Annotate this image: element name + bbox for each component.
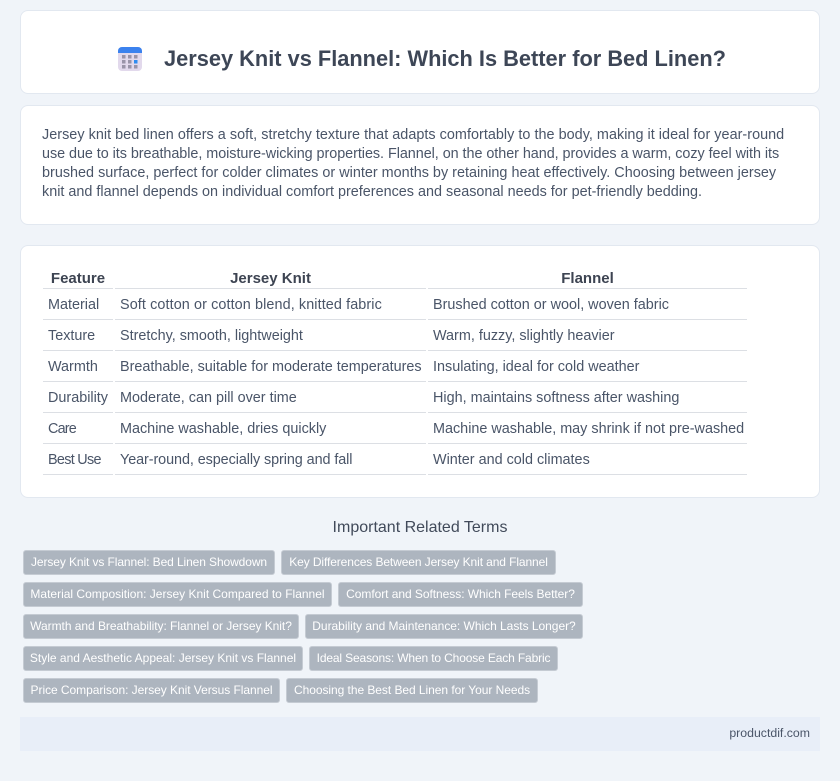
comparison table: Warmth [48,359,98,375]
comparison table: Winter and cold climates [433,452,590,468]
icon: calendar [118,47,142,71]
tag: Comfort and Softness: Which Feels Better? [346,587,575,601]
related terms tags [23,550,583,703]
tag: Warmth and Breathability: Flannel or Jersey Knit? [30,619,292,633]
intro paragraph: knit and flannel depends on individual comfort preferences and seasonal needs for pet-friendly bedding. [42,184,702,200]
comparison table: Stretchy, smooth, lightweight [120,328,303,344]
intro paragraph: brushed surface, perfect for colder climates or winter months by retaining heat effectively. Choosing between jersey [42,165,776,181]
comparison table: Machine washable, may shrink if not pre-washed [433,421,744,437]
comparison table: Jersey Knit [230,270,311,287]
comparison table: Durability [48,390,108,406]
comparison table: Breathable, suitable for moderate temperatures [120,359,422,375]
tag [23,614,299,639]
comparison table: Insulating, ideal for cold weather [433,359,639,375]
tag: Choosing the Best Bed Linen for Your Needs [294,683,530,697]
intro paragraph: use due to its breathable, moisture-wicking properties. Flannel, on the other hand, provides a warm, cozy feel with its [42,146,779,162]
related terms heading: Important Related Terms [333,519,507,536]
intro text panel [20,105,820,225]
tag: Jersey Knit vs Flannel: Bed Linen Showdown [31,555,267,569]
tag [309,646,558,671]
comparison table: Flannel [561,270,614,287]
intro paragraph [42,127,784,200]
tag [305,614,583,639]
comparison table: High, maintains softness after washing [433,390,679,406]
comparison table panel [20,245,820,498]
tag: Style and Aesthetic Appeal: Jersey Knit vs Flannel [30,651,296,665]
comparison table: Best Use [48,452,101,468]
header panel [20,10,820,94]
tag: Price Comparison: Jersey Knit Versus Flannel [31,683,272,697]
tag [281,550,556,575]
tag [23,582,332,607]
title: Jersey Knit vs Flannel: Which Is Better for Bed Linen? [164,46,726,71]
comparison table: Year-round, especially spring and fall [120,452,352,468]
comparison table: Material [48,297,99,313]
comparison table: Texture [48,328,95,344]
comparison table: Brushed cotton or wool, woven fabric [433,297,669,313]
tag: Ideal Seasons: When to Choose Each Fabric [317,651,550,665]
tag: Durability and Maintenance: Which Lasts Longer? [312,619,576,633]
tag [23,646,303,671]
tag [286,678,538,703]
tag [23,678,280,703]
comparison table: Care [48,421,76,437]
footer site name: productdif.com [729,726,810,740]
comparison table: Machine washable, dries quickly [120,421,326,437]
comparison table: Soft cotton or cotton blend, knitted fabric [120,297,382,313]
tag: Key Differences Between Jersey Knit and Flannel [289,555,548,569]
intro paragraph: Jersey knit bed linen offers a soft, stretchy texture that adapts comfortably to the body, making it ideal for year-round [42,127,784,143]
comparison table: Feature [51,270,105,287]
tag [338,582,583,607]
comparison table [43,270,747,475]
comparison table: Warm, fuzzy, slightly heavier [433,328,615,344]
footer bar [20,717,820,751]
comparison table: Moderate, can pill over time [120,390,297,406]
tag [23,550,275,575]
tag: Material Composition: Jersey Knit Compared to Flannel [30,587,325,601]
